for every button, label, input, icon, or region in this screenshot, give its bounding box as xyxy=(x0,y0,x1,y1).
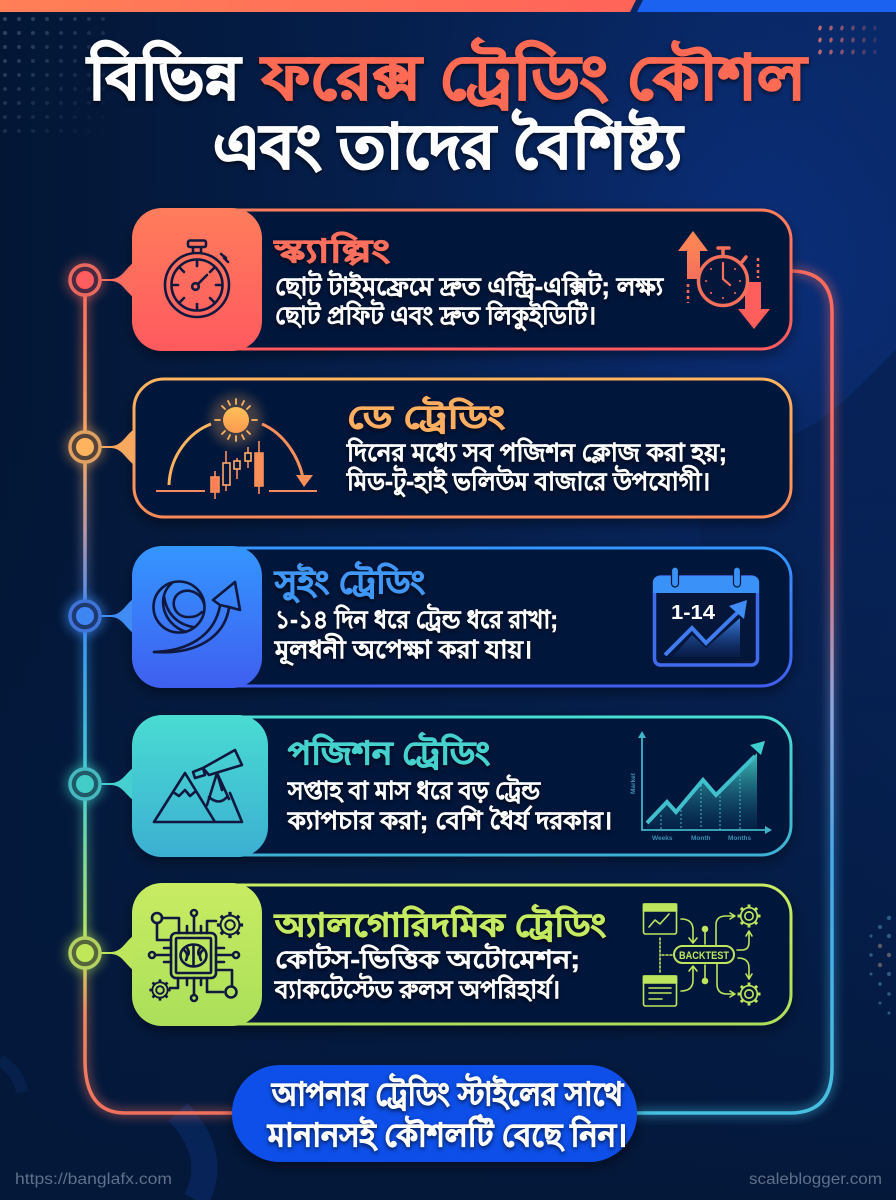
title: ফরেক্স ট্রেডিং কৌশল xyxy=(260,37,808,113)
title: বিভিন্ন xyxy=(86,41,243,113)
footer link: scaleblogger: scaleblogger.com xyxy=(749,1171,882,1188)
icon: sun arc with candlesticks xyxy=(156,394,317,499)
icon tile: wave and arrow xyxy=(132,546,262,688)
heading: scalping: স্ক্যাল্পিং xyxy=(274,231,390,269)
decorative dots: right side xyxy=(869,916,891,1014)
chart: long-term uptrend: Weeks xyxy=(652,835,673,842)
icon: backtest flow diagram: BACKTEST xyxy=(679,950,729,962)
card frame: swing trading xyxy=(134,548,791,686)
icon: calendar chart 1-14 xyxy=(653,567,759,665)
connector and node: day trading xyxy=(65,427,134,467)
text: day trading xyxy=(346,437,727,498)
panel: day trading xyxy=(65,379,791,517)
text: position trading: সপ্তাহ বা মাস ধরে বড় ট্রেন্ড xyxy=(287,774,541,805)
icon: calendar chart 1-14: 1-14 xyxy=(671,602,716,624)
footer link: banglafx: https://banglafx.com xyxy=(15,1171,172,1188)
text: algorithmic trading: কোটস-ভিত্তিক অটোমেশন; xyxy=(275,943,580,974)
title xyxy=(86,37,808,182)
panel: algorithmic trading xyxy=(65,883,791,1026)
text: position trading xyxy=(287,774,612,835)
card frame: algorithmic trading xyxy=(134,885,791,1024)
panel: position trading xyxy=(65,715,791,857)
chart: long-term uptrend: Market xyxy=(630,772,637,794)
card frame: position trading xyxy=(134,717,791,855)
card frame: day trading xyxy=(134,379,791,517)
icon tile: telescope and mountain xyxy=(132,715,268,857)
panel: swing trading xyxy=(65,546,791,688)
text: day trading: মিড-টু-হাই ভলিউম বাজারে উপযোগী। xyxy=(346,465,710,498)
top accent bar: coral xyxy=(0,0,636,12)
icon: stopwatch with up and down arrows xyxy=(678,231,770,329)
timeline connector: left rail xyxy=(85,280,240,1113)
call to action pill: আপনার ট্রেডিং স্টাইলের সাথে xyxy=(271,1073,624,1112)
card frame: scalping xyxy=(134,210,791,349)
icon: backtest flow diagram xyxy=(644,904,760,1006)
icon tile: stopwatch xyxy=(132,208,262,351)
connector and node: position trading xyxy=(65,764,134,804)
icon tile: AI chip with gears xyxy=(132,883,262,1026)
chart: long-term uptrend xyxy=(630,731,772,842)
call to action pill xyxy=(232,1065,637,1162)
text: scalping: ছোট প্রফিট এবং দ্রুত লিকুইডিটি। xyxy=(275,299,596,332)
text: day trading: দিনের মধ্যে সব পজিশন ক্লোজ করা হয়; xyxy=(346,437,727,467)
connector and node: scalping xyxy=(65,260,134,300)
text: scalping xyxy=(275,270,665,332)
connector and node: algorithmic trading xyxy=(65,933,134,973)
text: swing trading: মূলধনী অপেক্ষা করা যায়। xyxy=(274,633,532,666)
top accent bar: blue xyxy=(637,0,896,12)
panel: scalping xyxy=(65,208,791,351)
connector and node: swing trading xyxy=(65,596,134,636)
text: algorithmic trading xyxy=(274,943,580,1004)
heading: swing trading: সুইং ট্রেডিং xyxy=(274,561,425,603)
chart: long-term uptrend: Month xyxy=(691,835,711,842)
text: swing trading xyxy=(274,603,558,666)
heading: position trading: পজিশন ট্রেডিং xyxy=(288,732,490,771)
text: scalping: ছোট টাইমফ্রেমে দ্রুত এন্ট্রি-এক্সিট; লক্ষ্য xyxy=(275,270,665,301)
heading: algorithmic trading: অ্যালগোরিদমিক ট্রেডিং xyxy=(274,904,606,943)
text: algorithmic trading: ব্যাকটেস্টেড রুলস অপরিহার্য। xyxy=(274,973,560,1004)
text: position trading: ক্যাপচার করা; বেশি ধৈর্য দরকার। xyxy=(287,805,612,835)
text: swing trading: ১-১৪ দিন ধরে ট্রেন্ড ধরে রাখা; xyxy=(275,603,558,634)
heading: day trading: ডে ট্রেডিং xyxy=(347,396,505,435)
call to action pill: মানানসই কৌশলটি বেছে নিন। xyxy=(267,1114,627,1153)
title: এবং তাদের বৈশিষ্ট্য xyxy=(213,109,684,182)
timeline connector: right rail xyxy=(630,271,832,1113)
chart: long-term uptrend: Months xyxy=(728,835,751,842)
